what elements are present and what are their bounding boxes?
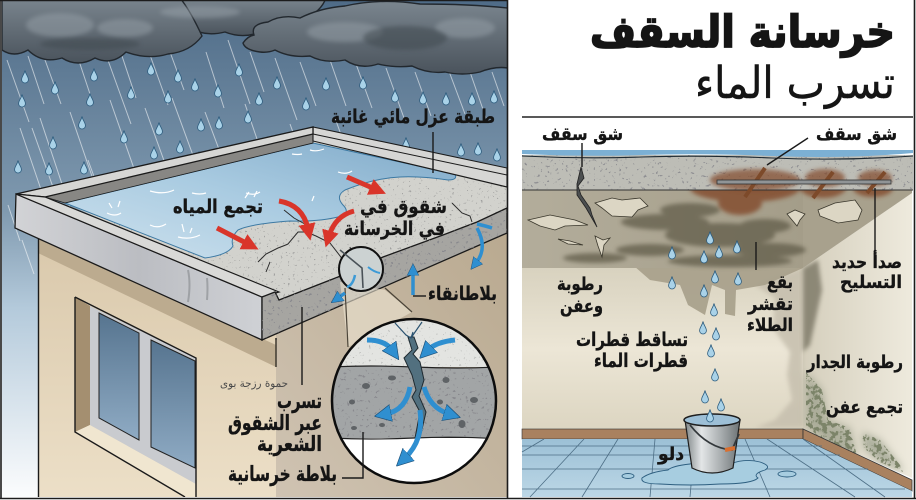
- label: concrete cracks: شقوق في: [360, 196, 447, 218]
- ceiling damp stains: [563, 203, 806, 267]
- blue seepage arrows: [338, 224, 492, 298]
- rust stains: [690, 174, 893, 215]
- panel: interior room illustration: [522, 117, 913, 497]
- label: damp and mould: [557, 274, 603, 317]
- label: dripping water: [576, 329, 688, 372]
- back wall: [522, 268, 803, 430]
- inset connector lines: [276, 288, 412, 367]
- label: roof crack right: شق سقف: [816, 124, 897, 145]
- label: seepage through hairline cracks: عبر الشقوق: [228, 411, 322, 435]
- label: roof crack left: شق سقف: [542, 124, 623, 145]
- label: water ponding: تجمع المياه: [173, 196, 263, 218]
- label: seepage through hairline cracks: تسرب: [277, 389, 322, 413]
- roof cracks: [258, 203, 472, 275]
- label: seepage through hairline cracks: [228, 398, 321, 456]
- label: bucket: دلو: [657, 444, 684, 465]
- parapet walls: [15, 127, 507, 340]
- label: rebar rust: صدأ حديد: [832, 250, 902, 273]
- subtitle: تسرب الماء: [695, 58, 895, 109]
- roof deck concrete: [65, 141, 507, 300]
- clouds: [2, 0, 508, 74]
- side wall: [803, 193, 912, 478]
- magnifier circle on roof: [339, 247, 383, 291]
- puddle on floor: [622, 460, 796, 485]
- label: mould buildup: تجمع عفن: [826, 397, 903, 418]
- ponding water: [65, 143, 456, 258]
- label: spalling: بلاطانقاء: [428, 283, 497, 305]
- label: concrete slab: بلاطة خرسانية: [228, 462, 337, 486]
- red arrows: [217, 177, 375, 244]
- bucket: [684, 410, 740, 473]
- label: concrete cracks: [344, 200, 446, 240]
- label: damp and mould: رطوبة: [557, 274, 603, 295]
- panel: rooftop illustration: [2, 0, 508, 500]
- label: paint peeling: تقشر: [747, 294, 793, 315]
- label: missing waterproofing: طبقة عزل مائي غائبة: [331, 106, 495, 128]
- label: rebar rust: التسليح: [840, 272, 902, 293]
- building wall: [38, 234, 507, 497]
- tiled floor: [522, 439, 912, 497]
- side water stain on back wall: [755, 268, 803, 428]
- raindrops: [15, 62, 500, 183]
- ceiling: [522, 190, 803, 268]
- inset detail circle: [330, 318, 498, 484]
- side ceiling: [803, 190, 912, 268]
- label: seepage through hairline cracks: الشعرية: [257, 432, 322, 456]
- side wall stain: [803, 260, 822, 352]
- water ripples: [107, 149, 352, 238]
- leader lines right panel: [582, 138, 875, 270]
- rain streaks: [7, 40, 504, 274]
- label: paint peeling: بقع: [767, 272, 793, 293]
- leader lines left panel: [302, 132, 433, 478]
- rebar: [717, 168, 891, 198]
- label: paint peeling: [747, 272, 793, 336]
- label: dripping water: قطرات الماء: [594, 350, 688, 372]
- up arrow leader: [413, 295, 426, 297]
- concrete slab section: [522, 150, 913, 191]
- label: dripping water: تساقط قطرات: [576, 329, 688, 351]
- concrete slab edge: [262, 208, 507, 340]
- label: rebar rust: [832, 250, 902, 293]
- label: paint peeling: الطلاء: [747, 315, 793, 336]
- peeling paint patches: [528, 198, 862, 257]
- dripping drops: [669, 232, 741, 411]
- mould on side wall: [806, 372, 903, 472]
- label: damp and mould: وعفن: [560, 296, 603, 317]
- small caption: حموة رزجة بوى: [220, 377, 288, 390]
- ceiling crack: [577, 167, 597, 227]
- label: concrete cracks: في الخرسانة: [344, 218, 445, 240]
- skirting: [522, 429, 912, 491]
- window: [75, 297, 196, 497]
- top water stain on back wall: [634, 264, 803, 316]
- inset light cone: [340, 282, 412, 347]
